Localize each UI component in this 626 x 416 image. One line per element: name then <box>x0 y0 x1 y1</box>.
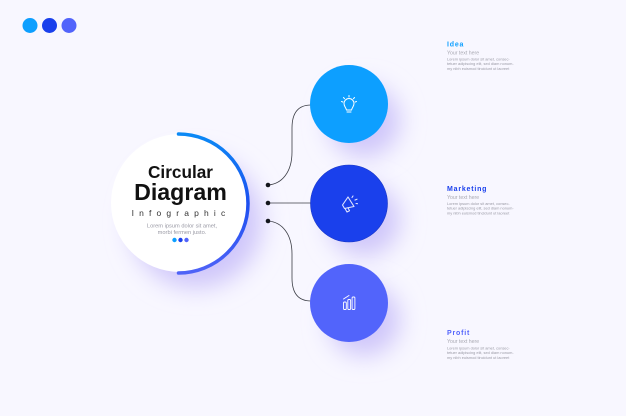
heading: Infographic: Infographic <box>132 208 230 218</box>
text block: profit: Your text here <box>447 339 479 345</box>
icon: light bulb <box>342 96 356 112</box>
text block: marketing: Marketing <box>447 186 487 193</box>
text block: marketing: Your text here <box>447 195 479 201</box>
text block: idea: Your text here <box>447 50 479 56</box>
text block: marketing: Lorem ipsum dolor sit amet, consec- <box>447 201 510 206</box>
text block: idea <box>447 42 514 71</box>
panel: central circle: morbi fermen justo. <box>158 230 207 236</box>
text block: idea: tetuer adipiscing elit, sed diam nonum- <box>447 61 514 66</box>
progress arc <box>178 134 248 273</box>
small dots <box>172 238 189 242</box>
panel: profit circle <box>310 264 400 356</box>
panel: idea circle <box>310 65 400 157</box>
text block: marketing: tetuer adipiscing elit, sed diam nonum- <box>447 206 514 211</box>
text block: profit: my nibh euismod tincidunt ut laoreet <box>447 355 510 360</box>
text block: lorem: Lorem ipsum dolor sit amet, <box>147 224 218 230</box>
connector: bottom <box>266 219 311 301</box>
text block: profit: Profit <box>447 330 470 337</box>
icon: megaphone <box>342 196 358 212</box>
panel: central circle <box>111 134 262 288</box>
connector: middle <box>266 201 311 205</box>
connector: top <box>266 105 311 187</box>
text block: idea: Idea <box>447 42 464 48</box>
text block: idea: my nibh euismod tincidunt ut laoreet <box>447 66 510 71</box>
heading: Diagram: Diagram <box>134 179 227 205</box>
text block: idea: Lorem ipsum dolor sit amet, consec- <box>447 56 510 62</box>
text block: profit <box>447 330 514 360</box>
text block: marketing: my nibh euismod tincidunt ut laoreet <box>447 210 510 215</box>
text block: profit: Lorem ipsum dolor sit amet, consec- <box>447 346 510 350</box>
text block: marketing <box>447 186 514 215</box>
heading: Circular: Circular <box>148 162 213 182</box>
text block: profit: tetuer adipiscing elit, sed diam nonum- <box>447 350 514 355</box>
icon: bar chart <box>344 296 355 310</box>
legend dots <box>22 18 76 33</box>
panel: marketing circle <box>310 165 400 256</box>
